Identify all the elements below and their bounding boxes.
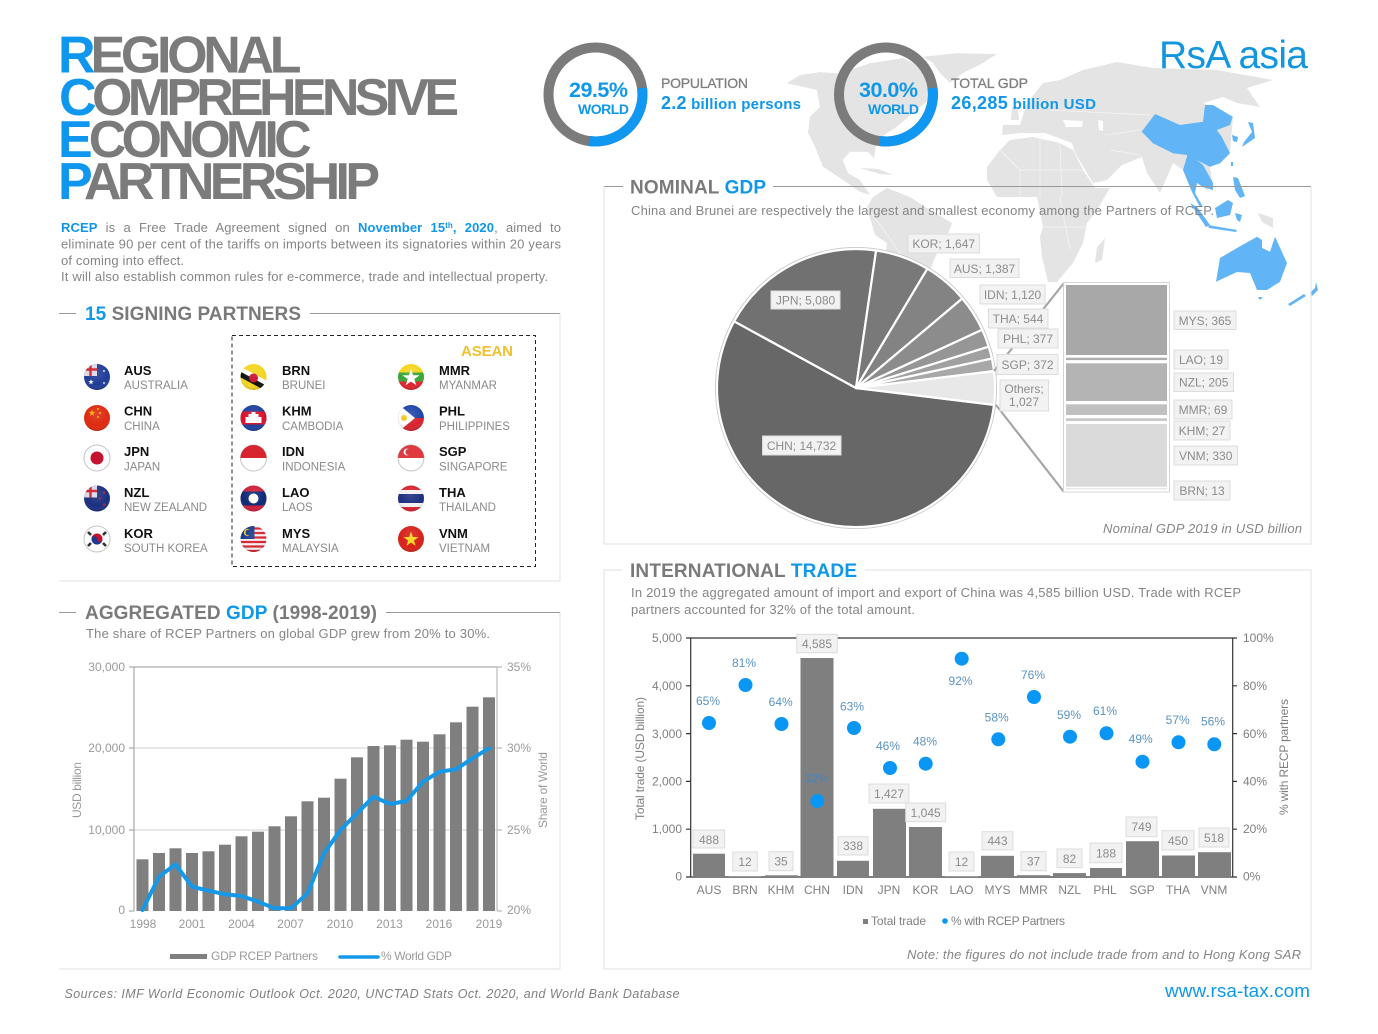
country: Cambodia: KHM <box>282 404 312 418</box>
chart legend: % World GDP <box>381 949 452 963</box>
intro text: It will also establish common rules for e-commerce, trade and intellectual property. <box>61 269 548 284</box>
country labels: MYS <box>984 883 1011 897</box>
country: Brunei <box>240 364 324 390</box>
left axis labels: 2,000 <box>652 774 682 788</box>
value labels: 1,045 <box>911 806 941 820</box>
right axis labels: 20% <box>507 903 531 917</box>
percent labels: 58% <box>985 711 1009 725</box>
subtitle: international trade: In 2019 the aggregated amount of import and export of China was 4,585 billion USD. Trade with RCEP <box>631 585 1241 600</box>
country: Malaysia: MYS <box>282 526 310 541</box>
RsA asia logo: RsA asia <box>1159 34 1308 77</box>
percent labels: 48% <box>913 735 937 749</box>
right axis labels: 35% <box>507 660 531 674</box>
percent labels: 76% <box>1021 668 1045 682</box>
country: Japan <box>84 444 160 474</box>
country labels: VNM <box>1201 883 1227 897</box>
subtitle: international trade: partners accounted for 32% of the total amount. <box>631 602 915 617</box>
subtitle: international trade <box>631 585 1241 617</box>
percent labels: 46% <box>876 739 900 753</box>
intro text <box>61 220 562 284</box>
value labels: 37 <box>1027 855 1040 869</box>
value labels: 518 <box>1204 831 1224 845</box>
year labels: 2004 <box>228 917 255 931</box>
stacked bar labels: VNM; 330 <box>1179 449 1233 463</box>
country: New Zealand: NEW ZEALAND <box>124 502 207 514</box>
country: New Zealand: NZL <box>124 485 149 500</box>
stacked bar labels: BRN; 13 <box>1179 484 1225 498</box>
share dots <box>702 652 1221 808</box>
chart legend <box>863 914 1065 928</box>
country labels: LAO <box>949 883 974 897</box>
heading: nominal GDP: NOMINAL GDP <box>630 178 766 198</box>
country: Japan: JAPAN <box>124 462 160 474</box>
country: China <box>84 405 160 431</box>
percent labels: 64% <box>769 695 793 709</box>
country labels: AUS <box>697 883 721 897</box>
trade chart <box>633 631 1291 928</box>
left axis labels: 10,000 <box>88 823 125 837</box>
country: China: CHINA <box>124 421 160 433</box>
left axis labels: 0 <box>118 903 125 917</box>
panel: international trade <box>604 561 1311 969</box>
country: Thailand <box>398 486 496 512</box>
value labels: 338 <box>843 839 863 853</box>
title: ARTNERSHIP <box>84 153 380 211</box>
percent labels: 63% <box>840 700 864 714</box>
year labels: 2010 <box>327 917 354 931</box>
percent labels: 81% <box>732 656 756 670</box>
country labels: NZL <box>1058 883 1081 897</box>
value labels: 488 <box>699 833 719 847</box>
value labels: 4,585 <box>802 637 832 651</box>
country: Singapore: SGP <box>439 444 467 459</box>
country: Laos: LAOS <box>282 502 313 514</box>
heading: international trade: INTERNATIONAL TRADE <box>630 561 857 582</box>
note: trade: Note: the figures do not include trade from and to Hong Kong SAR <box>907 947 1301 962</box>
right axis labels: 0% <box>1243 870 1261 884</box>
caption: nominal GDP: Nominal GDP 2019 in USD billion <box>1103 521 1302 536</box>
percent labels: 61% <box>1093 704 1117 718</box>
right axis labels: 60% <box>1243 727 1267 741</box>
country: Thailand: THA <box>439 485 466 500</box>
trade bars <box>693 658 1231 877</box>
country: Vietnam: VNM <box>439 526 468 541</box>
country labels: KOR <box>912 883 939 897</box>
country: Vietnam: VIETNAM <box>439 543 490 555</box>
percent labels: 59% <box>1057 708 1081 722</box>
seas and borders <box>1063 120 1103 131</box>
GDP stat: 30.0% <box>859 78 918 102</box>
right axis labels: 25% <box>507 823 531 837</box>
population stat: POPULATION <box>661 75 748 91</box>
percent labels: 32% <box>805 772 829 786</box>
pie labels: IDN; 1,120 <box>984 288 1042 302</box>
chart legend <box>170 949 452 963</box>
value labels: 35 <box>774 855 788 869</box>
right axis labels <box>507 660 531 917</box>
country: Indonesia: INDONESIA <box>282 462 346 474</box>
left axis title: Total trade (USD billion) <box>633 697 647 820</box>
title: P <box>58 153 93 211</box>
intro text: , aimed to <box>494 220 561 235</box>
year labels: 2013 <box>376 917 403 931</box>
country: Malaysia: MALAYSIA <box>282 543 339 555</box>
pie labels: CHN; 14,732 <box>767 439 837 453</box>
country labels: MMR <box>1019 883 1048 897</box>
right axis labels <box>1243 631 1274 884</box>
value labels: 1,427 <box>874 787 904 801</box>
left axis labels: 4,000 <box>652 679 682 693</box>
country labels: IDN <box>843 883 863 897</box>
subtitle: aggregated GDP: The share of RCEP Partners on global GDP grew from 20% to 30%. <box>86 626 490 641</box>
percent labels <box>696 656 1225 786</box>
right axis title: Share of World <box>536 752 550 828</box>
country: Australia: AUSTRALIA <box>124 380 188 392</box>
country: Australia <box>84 364 188 390</box>
year labels: 2016 <box>426 917 453 931</box>
left axis title: USD billion <box>70 762 84 818</box>
right axis title: % with RECP partners <box>1277 699 1291 815</box>
year labels: 2001 <box>179 917 206 931</box>
value labels: 12 <box>955 855 968 869</box>
website link: www.rsa-tax.com <box>1164 981 1310 1002</box>
title: EGIONAL <box>90 26 302 84</box>
pie labels: Others; <box>1004 382 1044 396</box>
ASEAN dashed box <box>232 336 536 566</box>
country: Myanmar: MYANMAR <box>439 380 497 392</box>
country labels: THA <box>1166 883 1190 897</box>
panel: nominal GDP <box>604 178 1311 544</box>
country: Philippines <box>398 405 510 431</box>
country: Japan: JPN <box>124 444 149 459</box>
stacked bar labels: NZL; 205 <box>1179 376 1229 390</box>
country: Singapore <box>398 444 508 474</box>
subtitle: nominal GDP: China and Brunei are respectively the largest and smallest economy among the Partners of RCEP. <box>631 203 1214 218</box>
left axis labels: 30,000 <box>88 660 125 674</box>
left axis labels: 1,000 <box>652 822 682 836</box>
world map background <box>787 53 1318 306</box>
intro text: of coming into effect. <box>61 253 184 268</box>
sources footer: Sources: IMF World Economic Outlook Oct. 2020, UNCTAD Stats Oct. 2020, and World Bank Database <box>64 987 680 1001</box>
country: Thailand: THAILAND <box>439 502 496 514</box>
country: Philippines: PHL <box>439 404 465 418</box>
chart axes <box>686 638 1237 877</box>
GDP stat: 26,285 billion USD <box>951 93 1096 113</box>
pie labels: KOR; 1,647 <box>912 237 975 251</box>
ASEAN label: ASEAN <box>461 343 513 360</box>
title: OMPREHENSIVE <box>92 69 459 127</box>
country labels: JPN <box>878 883 900 897</box>
country: Myanmar <box>398 364 496 390</box>
heading: signing partners: 15 SIGNING PARTNERS <box>85 304 301 325</box>
value labels: 188 <box>1096 846 1116 860</box>
country: Indonesia: IDN <box>282 444 304 459</box>
country: Indonesia <box>240 444 346 474</box>
country labels: CHN <box>804 883 830 897</box>
title <box>58 26 459 211</box>
chart legend: Total trade <box>871 914 926 928</box>
country: Laos <box>240 486 312 512</box>
year labels: 2019 <box>476 917 503 931</box>
value labels: 443 <box>987 834 1008 848</box>
country: Australia: AUS <box>124 363 152 378</box>
population stat: 29.5% <box>569 78 628 102</box>
value labels: 450 <box>1168 834 1188 848</box>
intro text: th <box>445 221 453 230</box>
panel: aggregated GDP <box>59 603 560 969</box>
percent labels: 56% <box>1201 715 1225 729</box>
others breakdown stacked bar <box>1064 282 1170 492</box>
population stat: WORLD <box>578 101 629 117</box>
right axis labels: 100% <box>1243 631 1274 645</box>
GDP bars <box>136 697 495 911</box>
title: CONOMIC <box>89 111 312 169</box>
pie labels <box>762 234 1058 455</box>
country: South Korea: KOR <box>124 526 154 541</box>
population donut ring <box>548 48 642 142</box>
country: Cambodia <box>240 405 344 431</box>
country: New Zealand <box>84 486 206 512</box>
value labels <box>693 634 1229 871</box>
pie labels: THA; 544 <box>993 312 1044 326</box>
title: R <box>58 26 96 84</box>
year labels <box>130 917 503 931</box>
country: Cambodia: CAMBODIA <box>282 421 344 433</box>
value labels: 749 <box>1131 820 1152 834</box>
world share line <box>142 748 489 910</box>
combo chart: GDP bars and world share line <box>70 660 550 963</box>
country: Malaysia <box>240 526 339 552</box>
percent labels: 92% <box>948 674 973 688</box>
intro text: , 2020 <box>453 220 494 235</box>
country: Brunei: BRN <box>282 363 310 378</box>
title: C <box>59 69 97 127</box>
percent labels: 57% <box>1166 713 1190 727</box>
right axis labels: 30% <box>507 741 531 755</box>
country labels: KHM <box>768 883 794 897</box>
country labels: SGP <box>1129 883 1155 897</box>
chart legend: % with RCEP Partners <box>951 914 1065 928</box>
country: Brunei: BRUNEI <box>282 380 325 392</box>
pie chart <box>716 248 996 528</box>
country: South Korea <box>84 526 208 555</box>
country: Philippines: PHILIPPINES <box>439 421 510 433</box>
pie labels: 1,027 <box>1009 395 1039 409</box>
right axis labels: 20% <box>1243 822 1267 836</box>
population stat: 2.2 billion persons <box>661 93 801 113</box>
stacked bar labels: KHM; 27 <box>1179 424 1226 438</box>
country: Vietnam <box>398 526 490 552</box>
right axis labels: 40% <box>1243 774 1267 788</box>
stacked bar labels: MMR; 69 <box>1179 403 1228 417</box>
stacked bar labels <box>1174 311 1238 500</box>
left axis labels: 20,000 <box>88 741 125 755</box>
GDP stat: WORLD <box>868 101 919 117</box>
country labels: BRN <box>732 883 758 897</box>
pie labels: PHL; 377 <box>1003 332 1053 346</box>
GDP stat <box>839 48 1096 142</box>
year labels: 1998 <box>130 917 157 931</box>
left axis labels: 3,000 <box>652 727 682 741</box>
intro text: eliminate 90 per cent of the tariffs on imports between its signatories within 20 years <box>61 236 562 252</box>
country: Myanmar: MMR <box>439 363 471 378</box>
pie labels: AUS; 1,387 <box>954 262 1016 276</box>
title: E <box>58 111 93 169</box>
GDP stat: TOTAL GDP <box>951 75 1028 91</box>
country: China: CHN <box>124 404 152 418</box>
left axis labels: 5,000 <box>652 631 682 645</box>
country: Laos: LAO <box>282 485 309 500</box>
pie labels: JPN; 5,080 <box>776 294 836 308</box>
stacked bar labels: LAO; 19 <box>1179 353 1223 367</box>
country: South Korea: SOUTH KOREA <box>124 543 208 555</box>
country labels: PHL <box>1093 883 1117 897</box>
value labels: 12 <box>738 855 752 869</box>
GDP donut ring <box>839 48 933 142</box>
country: Singapore: SINGAPORE <box>439 462 508 474</box>
chart legend: GDP RCEP Partners <box>211 949 318 963</box>
country labels <box>697 883 1227 897</box>
right axis labels: 80% <box>1243 679 1267 693</box>
population stat <box>548 48 801 142</box>
percent labels: 65% <box>696 694 720 708</box>
panel: 15 signing partners <box>59 304 560 581</box>
heading: aggregated GDP: AGGREGATED GDP (1998-2019) <box>85 603 377 624</box>
pie to bar connector lines <box>994 283 1064 492</box>
year labels: 2007 <box>277 917 304 931</box>
left axis labels: 0 <box>675 870 682 884</box>
left axis labels <box>652 631 682 884</box>
intro text: RCEP is a Free Trade Agreement signed on November 15 <box>61 220 445 235</box>
stacked bar labels: MYS; 365 <box>1179 314 1232 328</box>
left axis labels <box>88 660 125 917</box>
pie labels: SGP; 372 <box>1001 358 1054 372</box>
value labels: 82 <box>1063 852 1076 866</box>
percent labels: 49% <box>1129 732 1153 746</box>
